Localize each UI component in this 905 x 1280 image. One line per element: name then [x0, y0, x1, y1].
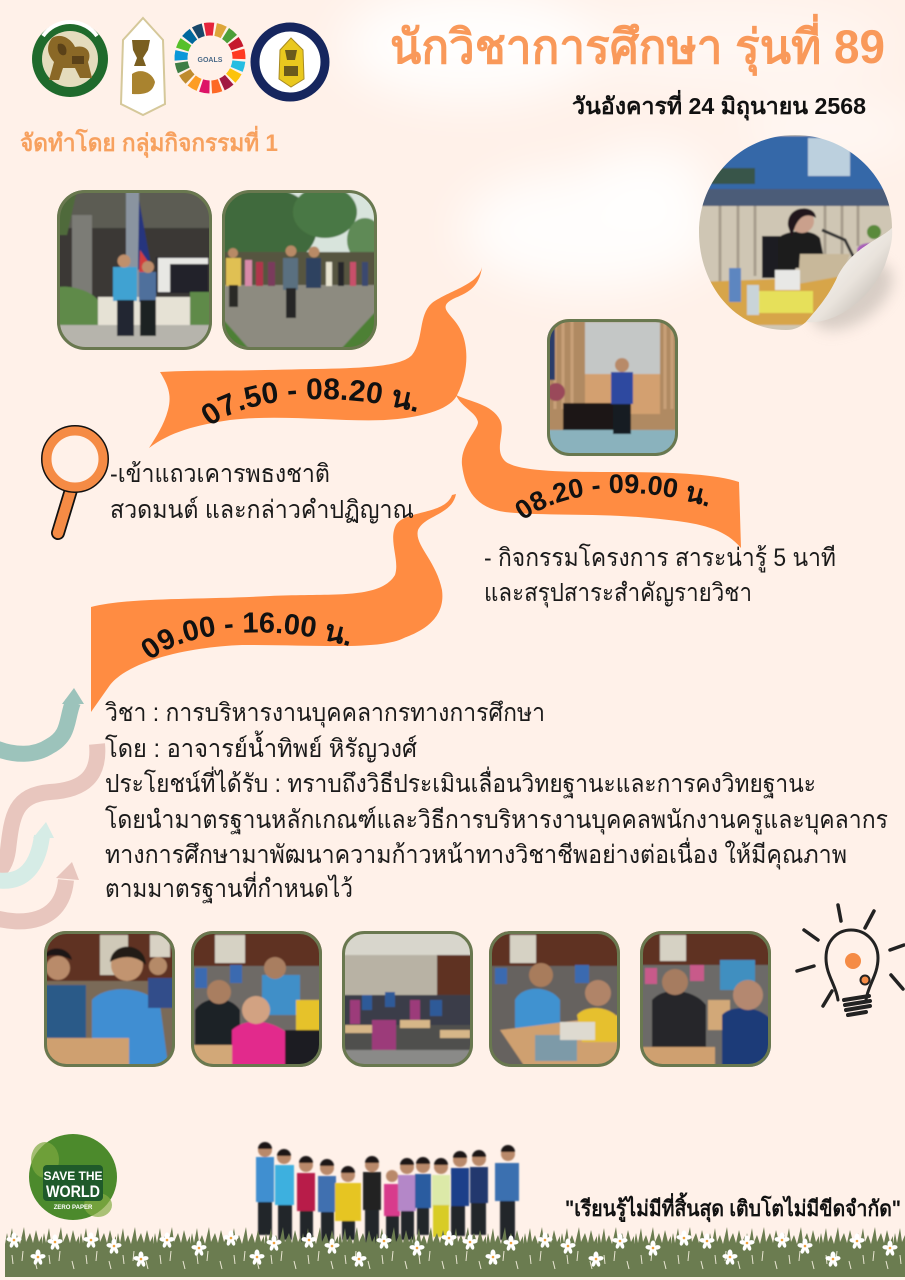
ribbon: 08.20 - 09.00	[456, 396, 741, 548]
logo: department seal	[32, 21, 108, 97]
badge: save the world	[29, 1134, 117, 1220]
logos row	[32, 18, 325, 115]
badge: save the world: SAVE THE	[43, 1169, 103, 1183]
frame: photo A	[58, 192, 210, 348]
text: second activity	[484, 543, 836, 608]
title: นักวิชาการศึกษา รุ่นที่ 89	[390, 13, 885, 76]
ribbon: 07.50 - 08.20	[149, 267, 482, 448]
photo: class 3	[342, 931, 473, 1067]
text: first activity: -เข้าแถวเคารพธงชาติ	[110, 460, 330, 488]
grass with flowers	[5, 1227, 905, 1277]
text: second activity: และสรุปสาระสำคัญรายวิชา	[484, 579, 752, 608]
ribbon: 09.00 - 16.00: 09.00 - 16.00 น.	[142, 612, 350, 658]
frame: photo C	[548, 320, 676, 454]
text: course details: โดย : อาจารย์น้ำทิพย์ หิรัญวงศ์	[105, 730, 417, 763]
ribbon: 09.00 - 16.00	[51, 494, 456, 712]
icon: light bulb	[797, 905, 904, 1015]
photo: class 4	[489, 931, 620, 1067]
photo: class 5	[640, 931, 771, 1067]
photo: speaker sticker with page curl	[699, 135, 898, 335]
organizer: จัดทำโดย กลุ่มกิจกรรมที่ 1	[20, 125, 278, 159]
page curl	[806, 228, 892, 322]
arrow: light teal wave	[0, 822, 54, 881]
photo: flag ceremony pair	[57, 190, 212, 350]
text: course details: ตามมาตรฐานที่กำหนดไว้	[105, 871, 353, 903]
badge: save the world: ZERO PAPER	[54, 1205, 93, 1211]
badge: save the world: WORLD	[46, 1182, 100, 1201]
arrow: pink lower wave	[0, 862, 79, 921]
photo: crowd at assembly	[222, 190, 377, 350]
photo: stage activity	[547, 319, 678, 456]
logo: shield	[121, 18, 165, 115]
ribbon: 08.20 - 09.00: 08.20 - 09.00 น.	[516, 474, 708, 518]
photo: class 2	[191, 931, 322, 1067]
logo: SDG wheel	[176, 24, 244, 92]
photo: class 1	[44, 931, 175, 1067]
text: course details: ประโยชน์ที่ได้รับ : ทราบถึงวิธีประเมินเลื่อนวิทยฐานะและการคงวิทยฐานะ	[105, 766, 816, 798]
text: first activity: สวดมนต์ และกล่าวคำปฏิญาณ	[110, 496, 414, 524]
text: course details: วิชา : การบริหารงานบุคคลากรทางการศึกษา	[105, 699, 545, 728]
frame: photo B	[224, 192, 376, 348]
group photo: team members	[256, 1142, 519, 1245]
logo: academic cohort seal	[255, 27, 325, 97]
arrow: teal wave	[0, 688, 84, 754]
decorative arrows: left waves	[0, 688, 97, 921]
logo: SDG label: GOALS	[198, 57, 223, 64]
ribbon: 07.50 - 08.20: 07.50 - 08.20 น.	[202, 378, 417, 424]
text: second activity: - กิจกรรมโครงการ สาระน่ารู้ 5 นาที	[484, 543, 836, 573]
icon: magnifying glass	[47, 431, 103, 533]
arrow: pink wave	[0, 744, 97, 875]
text: course details	[105, 699, 888, 903]
text: first activity	[110, 460, 414, 524]
text: course details: ทางการศึกษามาพัฒนาความก้าวหน้าทางวิชาชีพอย่างต่อเนื่อง ให้มีคุณภาพ	[105, 837, 847, 870]
date: วันอังคารที่ 24 มิถุนายน 2568	[572, 89, 866, 121]
